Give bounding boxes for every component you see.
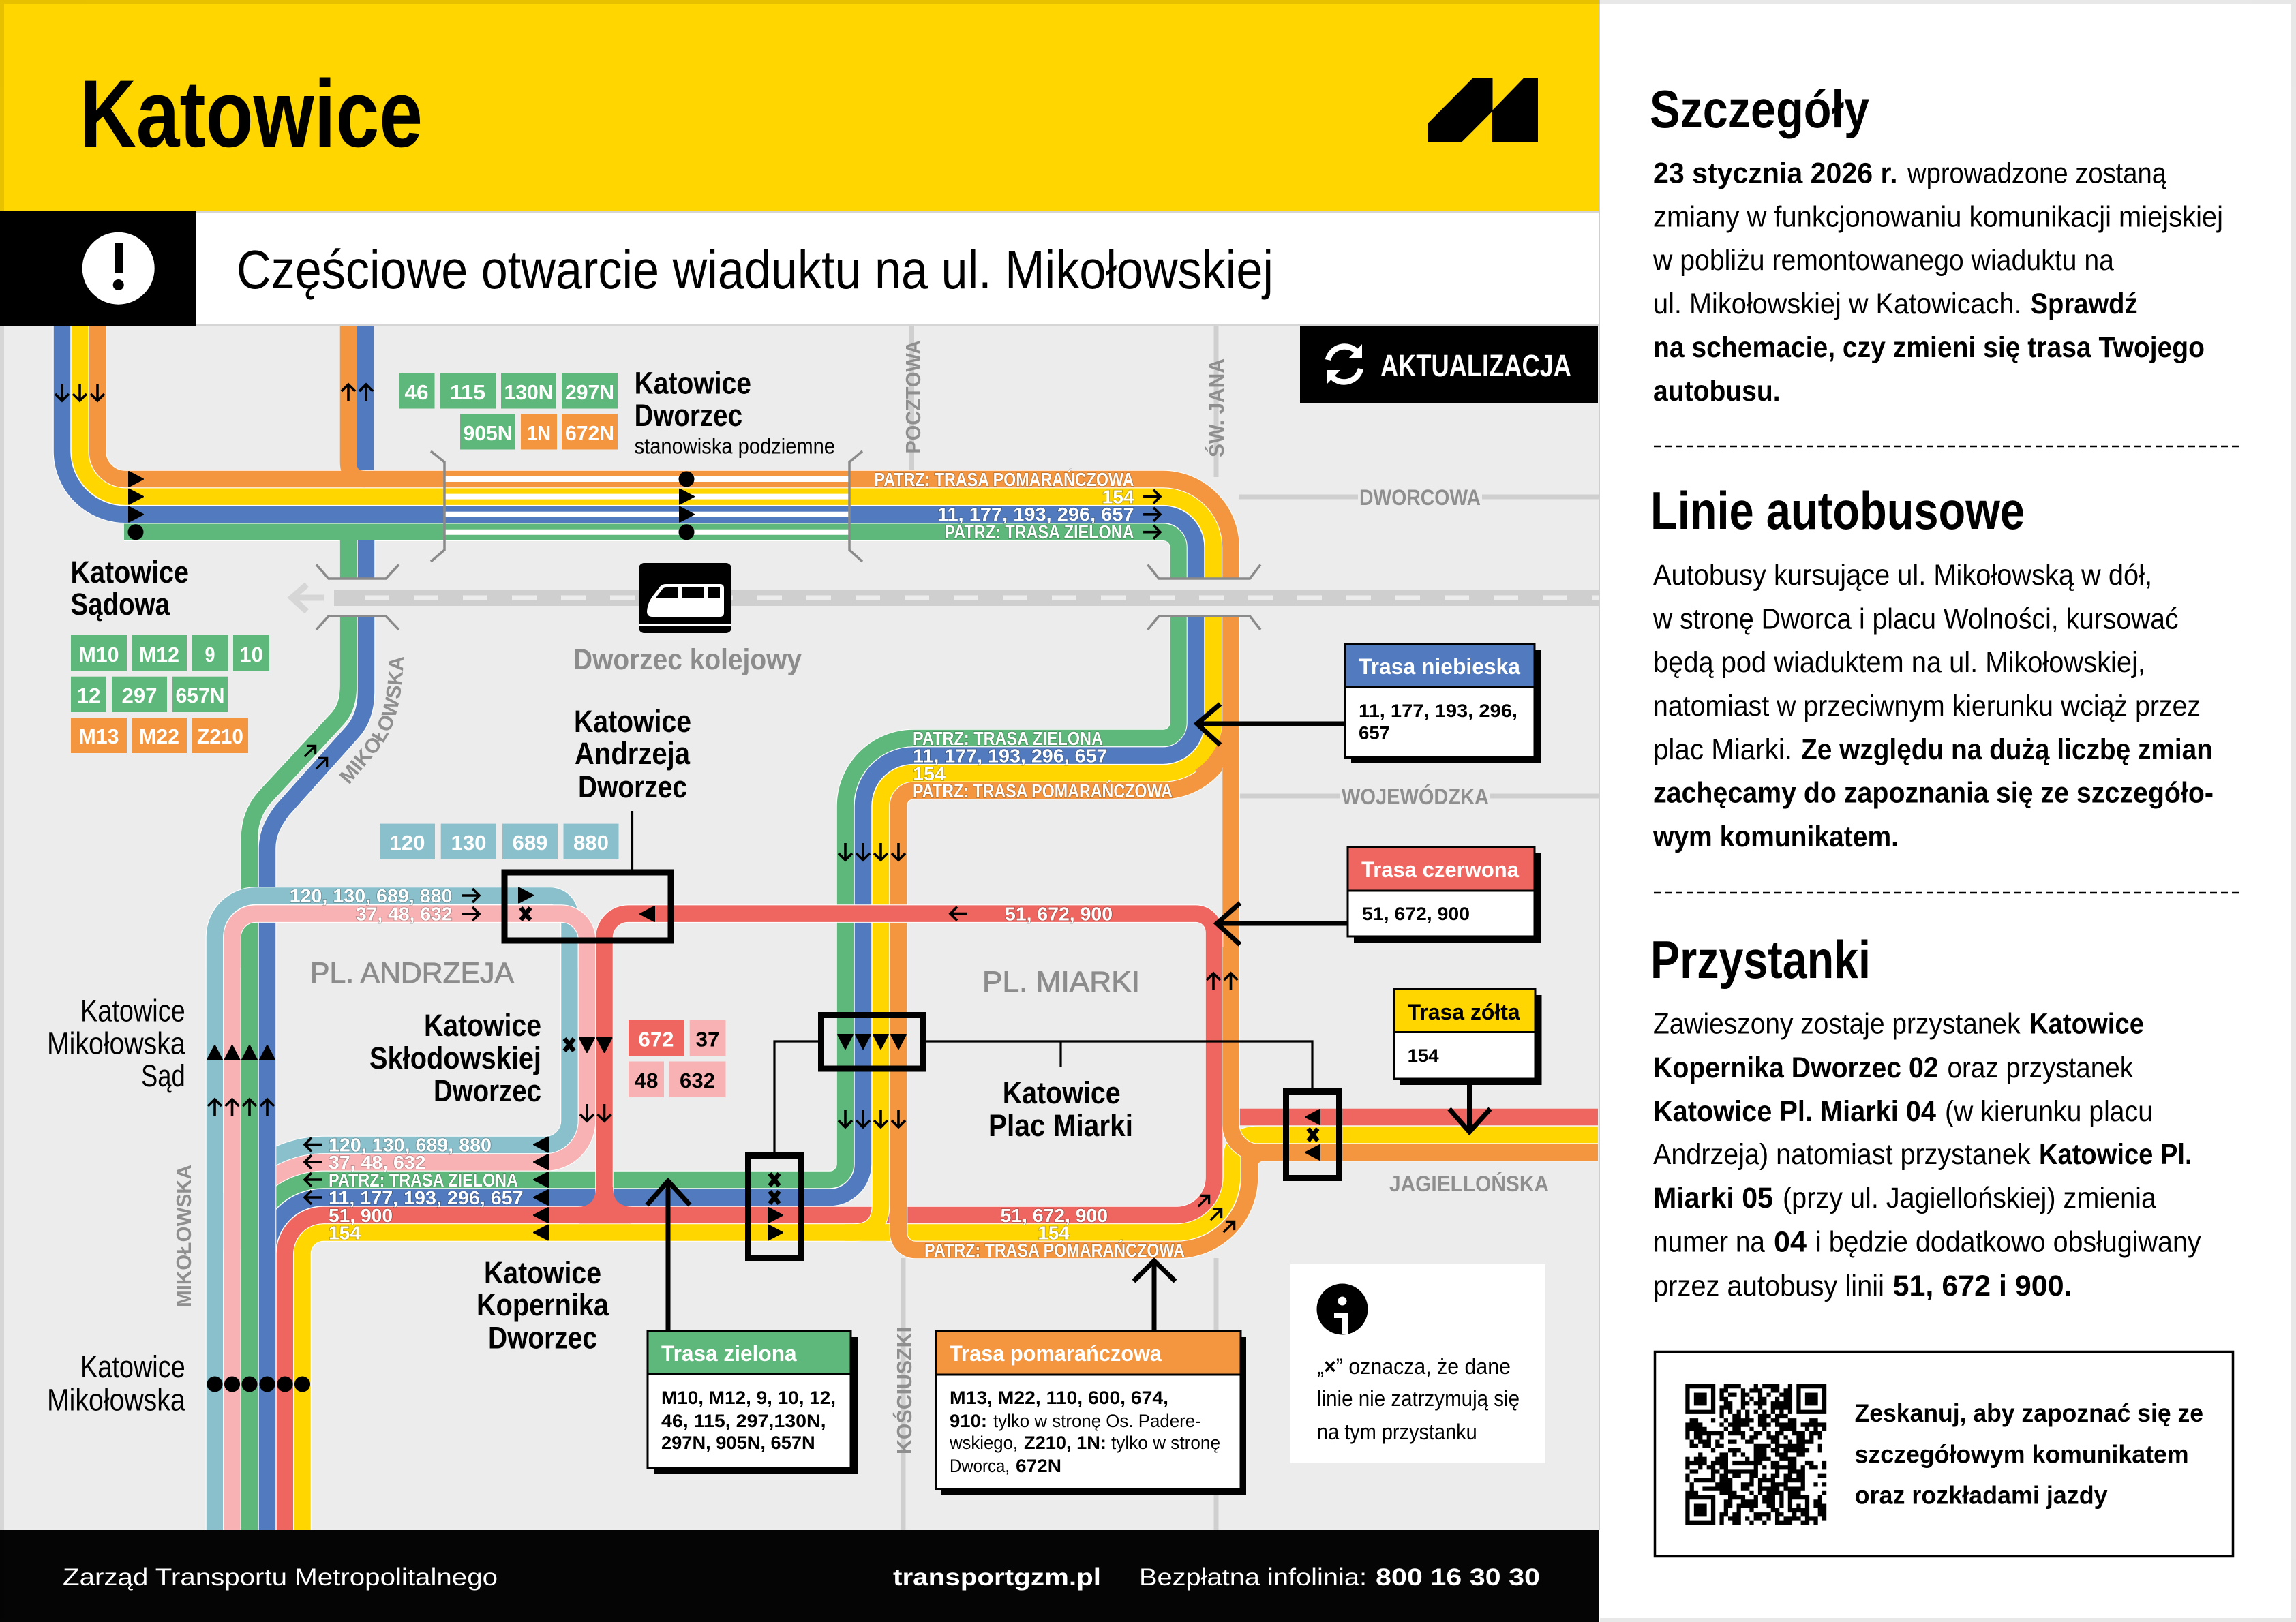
text: stops paragraph: Zawieszony zostaje przystanek <box>1653 1009 2021 1041</box>
line chips: 12 <box>76 684 101 707</box>
callout: Trasa zielona: 46, 115, 297,130N, <box>661 1411 826 1431</box>
line chips: 37 <box>695 1028 720 1051</box>
title: Katowice <box>80 60 423 167</box>
route labels: 120, 130, 689, 880 <box>329 1134 492 1156</box>
text: details paragraph: 23 stycznia 2026 r. <box>1653 158 1898 190</box>
route: blue <box>62 326 1196 1530</box>
panel: details <box>1650 79 2239 1557</box>
route labels: 51, 672, 900 <box>1005 904 1113 925</box>
text: stops paragraph: numer na <box>1653 1227 1765 1259</box>
badge: Aktualizacja <box>1300 326 1598 403</box>
line chips: M22 <box>139 724 179 748</box>
text: stops paragraph: Kopernika Dworzec 02 <box>1653 1052 1939 1084</box>
route labels: 154 <box>1038 1223 1070 1243</box>
text: bus lines paragraph: Ze względu na dużą liczbę zmian <box>1801 734 2213 766</box>
logo <box>1428 78 1538 142</box>
stop: Katowice Mikołowska <box>47 1349 186 1418</box>
footer <box>0 1530 1599 1622</box>
line chips: M12 <box>139 643 179 667</box>
callout: Trasa żółta: 154 <box>1408 1045 1439 1066</box>
icon: info <box>1317 1284 1368 1334</box>
route: red lower <box>285 932 1598 1530</box>
street names: PL. ANDRZEJA <box>310 957 514 990</box>
stop: Katowice Skłodowskiej Dworzec: Skłodowskiej <box>369 1041 541 1075</box>
line chips: 880 <box>573 831 609 855</box>
callout: Trasa pomarańczowa: 672N <box>1016 1456 1061 1476</box>
route labels: 51, 900 <box>329 1205 393 1226</box>
text: bus lines paragraph: będą pod wiaduktem na ul. Mikołowskiej, <box>1653 647 2145 679</box>
street names: JAGIELLOŃSKA <box>1389 1172 1549 1196</box>
text: bus lines paragraph: Autobusy kursujące ul. Mikołowską w dół, <box>1653 560 2152 592</box>
stop: Katowice Mikołowska Sąd <box>47 994 186 1093</box>
route labels: 154 <box>913 763 946 784</box>
QR caption: oraz rozkładami jazdy <box>1855 1482 2108 1510</box>
callout: Trasa pomarańczowa: M13, M22, 110, 600, 674, <box>950 1388 1168 1408</box>
stop: Katowice Skłodowskiej Dworzec: Katowice <box>424 1008 541 1043</box>
stop: Katowice Plac Miarki: Katowice <box>1003 1075 1121 1110</box>
line chips: 120 <box>390 831 425 855</box>
street names <box>172 340 1549 1454</box>
route labels: PATRZ: TRASA POMARAŃCZOWA <box>924 1240 1185 1261</box>
line chips: M10 <box>79 643 119 667</box>
QR code <box>1685 1384 1826 1525</box>
route: yellow <box>80 326 1598 1530</box>
callout: Trasa zielona: 297N, 905N, 657N <box>661 1433 815 1453</box>
subtitle: Częściowe otwarcie wiaduktu na ul. Mikołowskiej <box>237 239 1273 300</box>
line chips: 130N <box>504 380 554 404</box>
stop: Katowice Dworzec <box>399 366 835 458</box>
text: stops paragraph: (przy ul. Jagiellońskiej) zmienia <box>1783 1182 2156 1214</box>
line chips <box>380 824 619 859</box>
text: details paragraph: zmiany w funkcjonowaniu komunikacji miejskiej <box>1653 202 2223 234</box>
text: stops paragraph: i będzie dodatkowo obsługiwany <box>1815 1227 2201 1259</box>
stop: Katowice Andrzeja Dworzec <box>380 704 691 940</box>
route labels: PATRZ: TRASA ZIELONA <box>944 521 1134 542</box>
line chips: M13 <box>79 724 119 748</box>
stop: Katowice Skłodowskiej Dworzec <box>369 1008 725 1108</box>
callout: Trasa czerwona <box>1217 847 1541 945</box>
route: teal and pink overpass <box>215 896 587 968</box>
text: details paragraph: ul. Mikołowskiej w Katowicach. <box>1653 288 2022 320</box>
street names: MIKOŁOWSKA <box>339 657 404 784</box>
stop: Katowice Kopernika Dworzec: Dworzec <box>488 1321 597 1356</box>
label: Dworzec kolejowy: Dworzec kolejowy <box>573 643 802 676</box>
callout: Trasa pomarańczowa: Trasa pomarańczowa <box>950 1341 1162 1366</box>
stop frames: Plac Miarki and Kopernika <box>749 1015 1339 1258</box>
line chips: 130 <box>451 831 487 855</box>
stop: Katowice Andrzeja Dworzec: Katowice <box>574 704 691 739</box>
stop: Katowice Kopernika Dworzec: Katowice <box>484 1255 601 1290</box>
text: stops paragraph: (w kierunku placu <box>1945 1096 2153 1128</box>
bracket: underground section <box>431 451 862 562</box>
street names: DWORCOWA <box>1359 485 1481 510</box>
text: stops paragraph: Katowice Pl. <box>2039 1139 2192 1171</box>
text: details paragraph: Sprawdź <box>2031 288 2138 320</box>
text: details paragraph <box>1652 158 2223 408</box>
footer: 800 16 30 30 <box>1376 1564 1540 1591</box>
text: stops paragraph: Miarki 05 <box>1653 1182 1773 1214</box>
stop: Katowice Mikołowska Sąd: Mikołowska <box>47 1026 186 1061</box>
line chips: 9 <box>205 643 215 667</box>
callout: Trasa zielona: Trasa zielona <box>661 1341 797 1366</box>
street names: WOJEWÓDZKA <box>1342 784 1489 809</box>
callout: Trasa pomarańczowa: Z210, 1N: <box>1024 1433 1106 1453</box>
stop: Katowice Plac Miarki: Plac Miarki <box>988 1108 1133 1143</box>
callout: Trasa niebieska: 657 <box>1359 722 1390 743</box>
line chips <box>71 635 269 753</box>
panel: info legend: „×” oznacza, że dane <box>1317 1354 1511 1379</box>
line chips: 10 <box>239 643 263 667</box>
text: stops paragraph: Katowice Pl. Miarki 04 <box>1653 1096 1936 1128</box>
text: stops paragraph: 51, 672 i 900. <box>1893 1270 2072 1302</box>
text: bus lines paragraph: plac Miarki. <box>1653 734 1792 766</box>
stop: Katowice Sądowa: Sądowa <box>71 587 170 622</box>
stop: Katowice Andrzeja Dworzec: Andrzeja <box>575 736 691 771</box>
callout: Trasa pomarańczowa <box>936 1261 1246 1495</box>
stop: Katowice Dworzec: stanowiska podziemne <box>635 433 835 458</box>
text: stops paragraph <box>1653 1009 2201 1302</box>
text: details paragraph: na schemacie, czy zmieni się trasa Twojego <box>1653 332 2205 364</box>
text: stops paragraph: Andrzeja) natomiast przystanek <box>1653 1139 2031 1171</box>
route labels: 154 <box>329 1223 361 1243</box>
route labels: 37, 48, 632 <box>329 1152 425 1173</box>
street names: ŚW. JANA <box>1204 358 1228 457</box>
stop: Katowice Mikołowska: Katowice <box>80 1349 185 1384</box>
route labels: 11, 177, 193, 296, 657 <box>937 504 1134 525</box>
street names: KOŚCIUSZKI <box>892 1327 916 1454</box>
text: bus lines paragraph: w stronę Dworca i placu Wolności, kursować <box>1652 604 2179 635</box>
panel: info legend: linie nie zatrzymują się <box>1317 1386 1520 1411</box>
callout: Trasa zielona <box>647 1181 858 1474</box>
line chips: 632 <box>680 1069 715 1092</box>
callout: Trasa niebieska: 11, 177, 193, 296, <box>1359 701 1517 721</box>
QR caption: Zeskanuj, aby zapoznać się ze <box>1855 1399 2203 1427</box>
route labels: PATRZ: TRASA ZIELONA <box>329 1169 518 1191</box>
footer: Zarząd Transportu Metropolitalnego <box>63 1564 498 1591</box>
line chips: 672 <box>638 1028 674 1051</box>
text: details paragraph: wprowadzone zostaną <box>1907 158 2166 190</box>
stop: Katowice Dworzec: Katowice <box>635 366 751 401</box>
route labels: 11, 177, 193, 296, 657 <box>913 746 1107 767</box>
badge: Aktualizacja: AKTUALIZACJA <box>1380 348 1571 383</box>
stop frame <box>504 811 671 940</box>
route labels: 120, 130, 689, 880 <box>290 885 453 906</box>
callout: Trasa żółta: Trasa zółta <box>1408 1000 1520 1024</box>
callout: Trasa zielona: M10, M12, 9, 10, 12, <box>661 1388 836 1408</box>
callout: Trasa czerwona: 51, 672, 900 <box>1362 904 1470 924</box>
bridge brackets <box>316 564 1260 630</box>
route: teal <box>215 896 570 1530</box>
QR caption <box>1855 1399 2203 1510</box>
text: stops paragraph: oraz przystanek <box>1947 1052 2134 1084</box>
stop: Katowice Mikołowska Sąd: Sąd <box>141 1058 185 1093</box>
text: bus lines paragraph: zachęcamy do zapoznania się ze szczegóło- <box>1653 777 2214 810</box>
stop: Katowice Plac Miarki <box>988 1075 1133 1143</box>
stop: Katowice Skłodowskiej Dworzec: Dworzec <box>434 1073 541 1108</box>
callout: Trasa niebieska <box>1197 644 1541 763</box>
line chips: 1N <box>527 421 551 445</box>
footer: transportgzm.pl <box>893 1564 1101 1591</box>
stop: Katowice Mikołowska Sąd: Katowice <box>80 994 185 1028</box>
text: stops paragraph: 04 <box>1774 1227 1807 1259</box>
line chips: 115 <box>450 380 485 404</box>
route labels: 37, 48, 632 <box>356 904 453 925</box>
panel: info legend: na tym przystanku <box>1317 1420 1477 1444</box>
icon: refresh <box>1327 344 1362 384</box>
text: bus lines paragraph: wym komunikatem. <box>1652 821 1899 853</box>
route: orange <box>97 326 1598 1250</box>
text: bus lines paragraph <box>1652 560 2214 853</box>
header band <box>0 0 1600 1530</box>
route labels: PATRZ: TRASA ZIELONA <box>913 728 1103 749</box>
text: details paragraph: autobusu. <box>1653 376 1781 408</box>
line chips: 672N <box>565 421 614 445</box>
railway <box>292 579 1599 616</box>
arrow: railway direction <box>292 585 324 611</box>
route labels: 154 <box>1102 487 1134 508</box>
callout: Trasa pomarańczowa: 910: <box>950 1411 987 1431</box>
callout: Trasa pomarańczowa: tylko w stronę <box>1111 1433 1220 1453</box>
panel: info legend <box>1290 1264 1545 1463</box>
QR caption: szczegółowym komunikatem <box>1855 1441 2189 1469</box>
text: stops paragraph: przez autobusy linii <box>1653 1270 1884 1302</box>
street names: POCZTOWA <box>901 340 925 454</box>
heading: Przystanki: Przystanki <box>1650 930 1871 990</box>
callout: Trasa pomarańczowa: Dworca, <box>950 1456 1010 1476</box>
route labels: PATRZ: TRASA POMARAŃCZOWA <box>913 780 1173 801</box>
callout: Trasa pomarańczowa: wskiego, <box>949 1433 1018 1453</box>
panel: map <box>0 326 1599 1530</box>
text: stops paragraph: Katowice <box>2029 1009 2144 1041</box>
line chips: 48 <box>634 1069 659 1092</box>
line chips <box>399 373 618 450</box>
stop: Katowice Sądowa <box>71 555 269 753</box>
callout: Trasa żółta <box>1394 990 1542 1132</box>
stop: Katowice Sądowa: Katowice <box>71 555 189 590</box>
callout: Trasa niebieska: Trasa niebieska <box>1359 654 1520 679</box>
streets <box>903 326 1599 1530</box>
line chips: 297 <box>121 684 157 707</box>
route: pink <box>232 914 587 1530</box>
footer: Bezpłatna infolinia: <box>1139 1564 1367 1591</box>
text: details paragraph: w pobliżu remontowanego wiaduktu na <box>1652 245 2114 277</box>
icon: exclamation <box>82 232 155 305</box>
callout: Trasa czerwona: Trasa czerwona <box>1361 857 1519 882</box>
route labels: 51, 672, 900 <box>1001 1205 1108 1226</box>
line chips: 689 <box>513 831 548 855</box>
subtitle band <box>0 211 1599 326</box>
line chips: 46 <box>405 380 428 404</box>
panel: QR callout <box>1655 1352 2233 1557</box>
heading: Linie autobusowe: Linie autobusowe <box>1650 480 2025 540</box>
direction arrows <box>55 384 1239 1237</box>
route labels <box>290 469 1185 1261</box>
icon: train <box>639 563 731 633</box>
line chips: 905N <box>464 421 513 445</box>
route labels: 11, 177, 193, 296, 657 <box>329 1187 524 1208</box>
line chips: Z210 <box>197 724 243 748</box>
street names: PL. MIARKI <box>982 966 1140 998</box>
stop: Katowice Mikołowska: Mikołowska <box>47 1382 186 1418</box>
line chips <box>629 1020 725 1097</box>
callout: Trasa pomarańczowa: tylko w stronę Os. Padere- <box>993 1411 1201 1431</box>
underground section stripes <box>444 479 849 532</box>
text: bus lines paragraph: natomiast w przeciwnym kierunku wciąż przez <box>1653 690 2201 722</box>
line chips: 657N <box>176 684 225 707</box>
stop markers <box>128 472 1320 1392</box>
stop: Katowice Dworzec: Dworzec <box>635 398 742 433</box>
route: red upper <box>577 914 1214 1215</box>
stop: Katowice Kopernika Dworzec <box>477 1255 609 1356</box>
bus routes <box>62 326 1598 1530</box>
route labels: PATRZ: TRASA POMARAŃCZOWA <box>874 469 1134 490</box>
route: green <box>124 532 1179 1530</box>
heading: Szczegóły: Szczegóły <box>1650 79 1869 139</box>
street names: MIKOŁOWSKA <box>172 1165 196 1307</box>
stop: Katowice Kopernika Dworzec: Kopernika <box>477 1287 609 1322</box>
line chips: 297N <box>565 380 614 404</box>
stop: Katowice Andrzeja Dworzec: Dworzec <box>578 769 687 804</box>
